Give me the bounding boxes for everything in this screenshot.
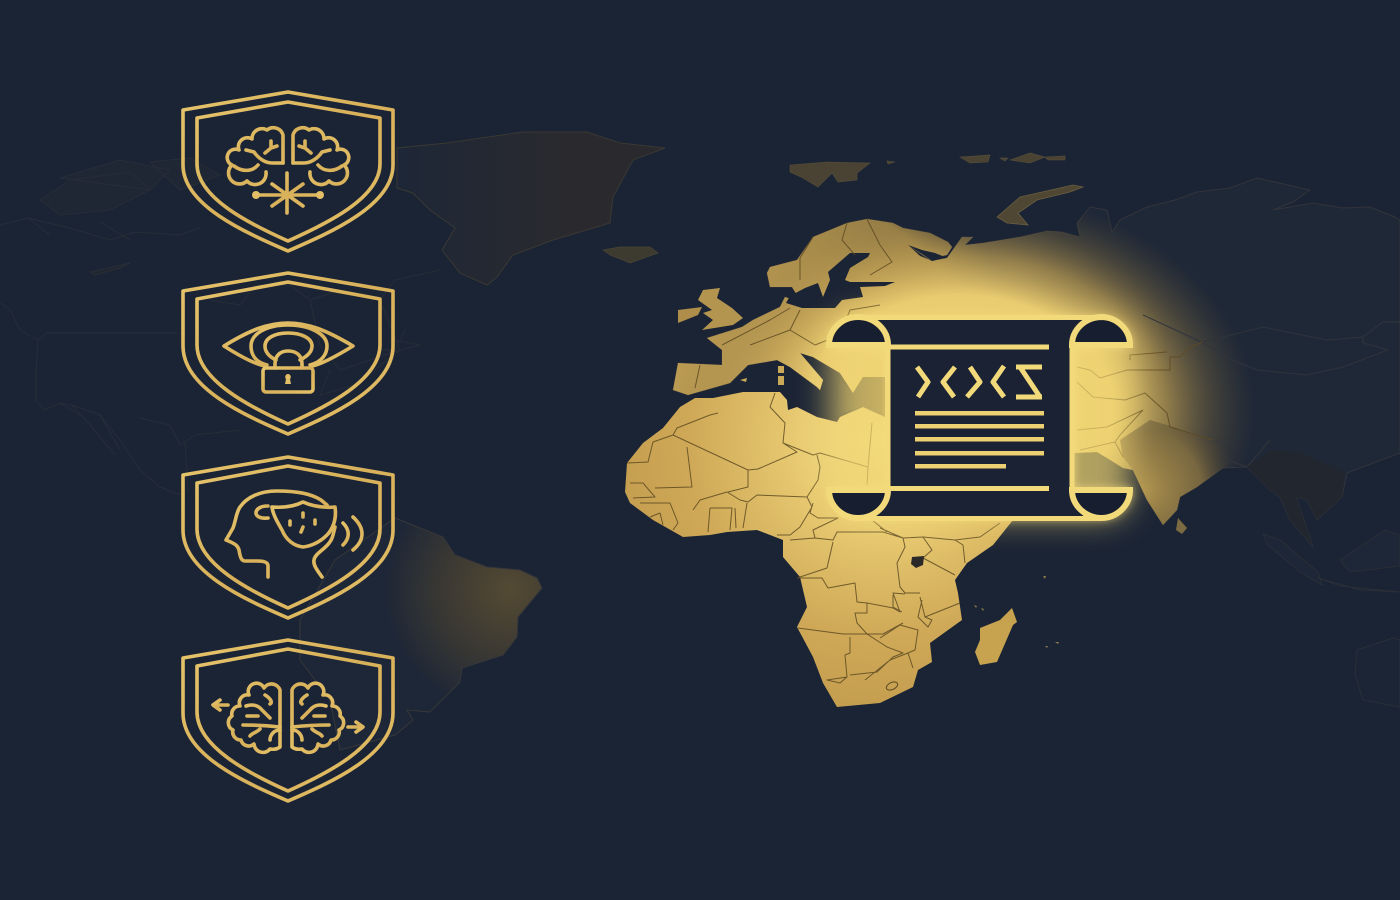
- map: south east asia islands: [1263, 530, 1400, 592]
- map: north america faint outlines: [0, 158, 440, 495]
- map: madagascar: [975, 608, 1017, 665]
- icon: brain: [227, 128, 349, 185]
- scroll text lines: [915, 411, 1044, 468]
- world map: [0, 132, 1400, 750]
- icon: snowflake nodes: [252, 173, 324, 213]
- shield 4: brain with arrows: [183, 640, 393, 801]
- scroll glow: [829, 318, 1131, 518]
- map: lesotho: [885, 680, 899, 692]
- map: ireland: [678, 307, 702, 323]
- scroll top-right curl: [1072, 317, 1130, 345]
- map: baltic sea: [786, 253, 895, 308]
- map: novaya zemlya: [997, 185, 1083, 225]
- shield 1: brain with snowflake: [183, 92, 393, 251]
- map: mediterranean islands: [740, 366, 784, 385]
- shield 2: eye and lock: [183, 273, 393, 434]
- arrow: left: [213, 700, 228, 710]
- map: great britain: [698, 288, 743, 330]
- scroll bottom-right curl: [1072, 490, 1130, 518]
- map: mediterranean near glow: [835, 377, 885, 417]
- shield outlines: [183, 273, 393, 434]
- scroll bottom-left curl: [829, 490, 888, 518]
- map: white sea: [908, 245, 945, 261]
- map: asia country borders: [1077, 315, 1400, 497]
- scroll top-left curl: [829, 317, 888, 345]
- scroll frame lines: [858, 318, 1101, 518]
- shield outlines: [183, 457, 393, 618]
- map: eurasia land: [673, 178, 1400, 547]
- icon: ear mark: [256, 506, 268, 518]
- shield outlines: [183, 640, 393, 801]
- icon: mask shield: [272, 502, 335, 547]
- map: india: [1120, 420, 1235, 525]
- scroll body: [873, 318, 1083, 518]
- map: sri lanka: [1176, 518, 1187, 534]
- map: africa: [625, 392, 1020, 707]
- map: indian ocean islands: [974, 576, 1059, 648]
- map: lake victoria: [911, 556, 924, 568]
- scroll glyph heading: [917, 366, 1042, 397]
- shield outlines: [183, 92, 393, 251]
- map: australia outline: [1355, 638, 1400, 707]
- map: greenland: [397, 132, 665, 285]
- document scroll: [829, 317, 1130, 518]
- icon: padlock: [263, 351, 313, 392]
- arrow: right: [348, 722, 363, 732]
- icon: brain split: [228, 683, 344, 752]
- shield 3: head with mask: [183, 457, 393, 618]
- icon: sound waves: [343, 517, 362, 550]
- map: iceland: [603, 247, 658, 263]
- map: south america: [300, 518, 542, 750]
- map: svalbard and arctic islands: [790, 153, 1065, 187]
- map: south east asia land: [1247, 450, 1345, 547]
- map: africa country borders: [627, 393, 1000, 683]
- icon: eye: [224, 323, 353, 366]
- map: europe country borders: [695, 219, 892, 388]
- icon: head profile: [226, 491, 335, 577]
